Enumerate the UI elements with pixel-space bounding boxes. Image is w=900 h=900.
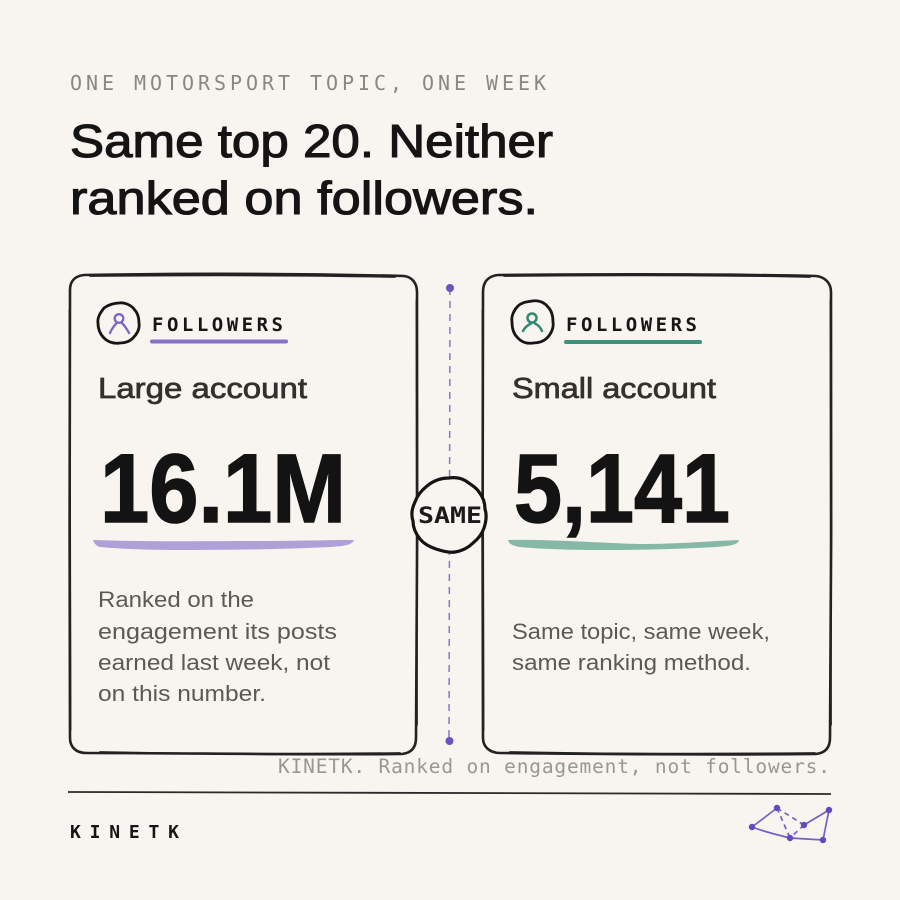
badge: same: SAME (418, 504, 482, 529)
icon: network constellation (749, 805, 832, 843)
panel: large account (70, 274, 417, 754)
title: ranked on followers. (70, 172, 538, 224)
footer rule (68, 792, 831, 794)
stat: 16.1M: 16.1M (100, 434, 346, 543)
description: small account: Same topic, same week, (512, 619, 770, 644)
brush underline: green (508, 540, 739, 550)
badge: same (412, 478, 486, 552)
subheading: small account: Small account (512, 373, 716, 405)
description: large account: engagement its posts (98, 619, 337, 644)
description: small account (512, 619, 770, 675)
label: followers: FOLLOWERS (566, 314, 697, 336)
connector: dashed line (446, 284, 454, 745)
description: large account: Ranked on the (98, 587, 254, 612)
card outline: large account (70, 274, 417, 754)
label underline (564, 340, 702, 344)
brush underline: purple (93, 540, 354, 550)
title: Same top 20. Neither (70, 115, 553, 167)
brand wordmark: KINETK (70, 822, 179, 843)
title (70, 115, 553, 224)
description: small account: same ranking method. (512, 650, 751, 675)
icon: green person badge (512, 301, 553, 343)
description: large account: earned last week, not (98, 650, 330, 675)
label underline (150, 340, 288, 344)
label: followers: FOLLOWERS (152, 314, 283, 336)
card outline: small account (482, 274, 831, 754)
description: large account: on this number. (98, 681, 266, 706)
subheading: large account: Large account (98, 373, 307, 405)
stat: 5,141: 5,141 (514, 434, 730, 543)
icon: purple person badge (98, 303, 139, 343)
description: large account (98, 587, 337, 706)
panel: small account (482, 274, 831, 754)
eyebrow: ONE MOTORSPORT TOPIC, ONE WEEK (70, 71, 546, 95)
footnote: KINETK. Ranked on engagement, not followers. (278, 755, 830, 778)
